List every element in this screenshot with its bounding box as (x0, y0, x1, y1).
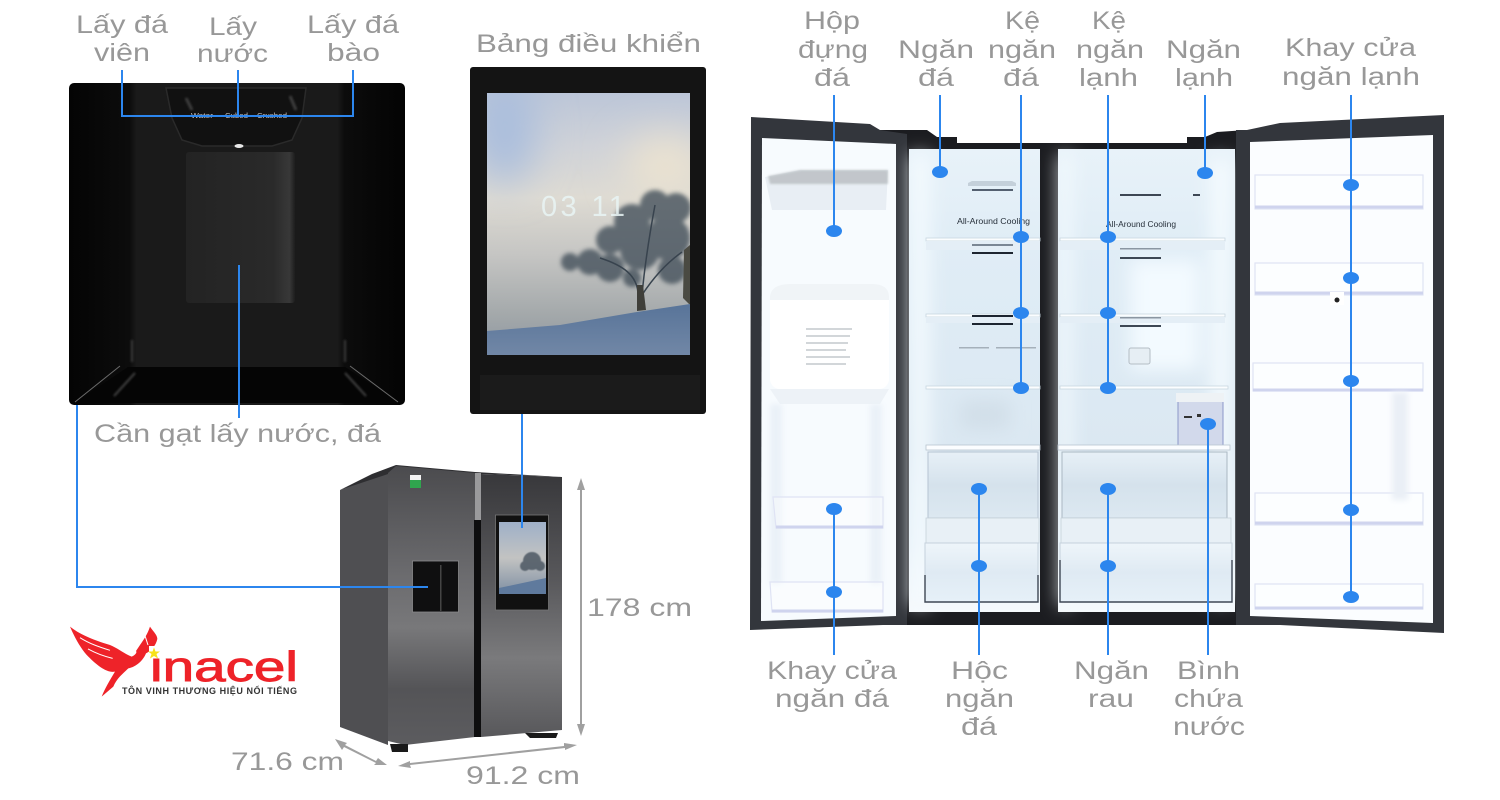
labels: open fridge bottom: nước (1173, 713, 1245, 741)
fridge lower drawer (1060, 518, 1232, 602)
freezer lower drawer (925, 518, 1039, 602)
bird emblem (70, 627, 157, 697)
labels: open fridge bottom: đá (961, 713, 997, 741)
clock: 03 11 (541, 191, 625, 223)
labels: open fridge top: đá (1003, 64, 1039, 92)
left door shades (770, 404, 882, 584)
freezer shelves (926, 181, 1040, 389)
tree (561, 190, 691, 311)
labels: open fridge bottom: rau (1088, 685, 1134, 713)
labels: open fridge bottom (767, 657, 1245, 741)
right door bins (1253, 175, 1423, 609)
fridge feet (390, 733, 558, 752)
freezer caption: All-Around Cooling (957, 217, 1030, 226)
snowy hill (487, 304, 690, 355)
labels: open fridge top: ngăn (988, 36, 1056, 64)
labels: open fridge top: Ngăn (1166, 36, 1241, 64)
dispenser control module: Cubed (225, 113, 248, 120)
fridge right door (481, 474, 562, 737)
panel: water and ice dispenser close-up (69, 83, 405, 405)
fridge cavity (1058, 149, 1235, 612)
dispenser floor (75, 340, 400, 403)
callout lines and markers: open fridge (826, 95, 1359, 655)
labels: dispenser: viên (94, 39, 150, 67)
label: control screen: Bảng điều khiển (476, 30, 701, 58)
right door liner (1250, 135, 1433, 623)
labels: dispenser: Lấy đá (76, 11, 168, 39)
labels: dimensions: 91.2 cm (466, 762, 580, 790)
labels: open fridge top: ngăn lạnh (1282, 63, 1420, 91)
sky tints (487, 93, 690, 196)
fridge top edge (340, 465, 562, 490)
labels: open fridge top (798, 7, 1420, 92)
right door frame (1236, 115, 1444, 633)
ice compartment (765, 170, 888, 210)
arrow: depth (335, 739, 387, 765)
labels: dimensions: 71.6 cm (231, 748, 344, 776)
dispenser lever (186, 152, 295, 303)
labels: open fridge top: Ngăn (898, 36, 974, 64)
labels: open fridge top: Kệ (1092, 7, 1126, 35)
star (148, 648, 160, 658)
labels: open fridge top: đá (814, 64, 850, 92)
ice maker cover (770, 284, 889, 404)
dispenser control module: Water (191, 113, 214, 120)
arrow: height (577, 478, 585, 736)
miniature dispenser (412, 561, 458, 612)
dispenser control module (166, 88, 306, 148)
labels: dispenser: nước (197, 40, 268, 68)
labels: dispenser: Cần gạt lấy nước, đá (94, 420, 381, 448)
panel: exterior fridge (340, 465, 562, 752)
labels: open fridge bottom: Bình (1177, 657, 1240, 685)
labels: dispenser: bào (327, 39, 380, 67)
wordmark: inacel (150, 643, 298, 690)
panel: open fridge (750, 115, 1444, 633)
energy label (410, 475, 421, 488)
left door frame (750, 117, 907, 630)
labels: open fridge top: ngăn (1076, 36, 1144, 64)
speaker grille (480, 375, 700, 410)
fridge shelves (1060, 194, 1228, 389)
fridge body frame (880, 130, 1247, 625)
labels: dispenser (76, 11, 399, 448)
miniature screen (496, 515, 548, 610)
labels: open fridge top: Khay cửa (1285, 34, 1416, 62)
labels: open fridge top: đá (918, 64, 954, 92)
labels: open fridge bottom: chứa (1174, 685, 1243, 713)
fridge left door (388, 466, 475, 745)
freezer cavity (909, 149, 1040, 612)
labels: open fridge bottom: ngăn đá (775, 685, 889, 713)
dispenser control module: Crushed (257, 113, 287, 120)
labels: open fridge top: lạnh (1079, 64, 1138, 92)
logo: Vinacel (70, 627, 298, 697)
letter i dot mask (149, 646, 160, 657)
freezer upper drawer (928, 452, 1038, 518)
labels: open fridge bottom: Hộc (951, 657, 1008, 685)
fridge side (340, 473, 388, 745)
panel: touch control screen (470, 67, 706, 414)
labels: open fridge top: Hộp (804, 7, 860, 35)
left door bins (770, 497, 883, 612)
cavity lighting (912, 155, 1230, 605)
labels: open fridge bottom: Khay cửa (767, 657, 897, 685)
arrow: width (398, 743, 577, 768)
labels: open fridge bottom: Ngăn (1074, 657, 1149, 685)
labels: open fridge bottom: ngăn (945, 685, 1014, 713)
water tank (1176, 393, 1224, 447)
labels: open fridge top: đựng (798, 36, 868, 64)
labels: dimensions: 178 cm (587, 594, 692, 622)
labels: dispenser: Lấy đá (307, 11, 399, 39)
fridge upper drawer (1062, 452, 1227, 518)
labels: dimensions (231, 594, 692, 790)
dimension arrows (335, 478, 585, 768)
screen wallpaper (487, 93, 690, 355)
freezer and fridge drawers (925, 445, 1232, 602)
fridge caption: All-Around Cooling (1106, 220, 1176, 229)
labels: dispenser: Lấy (209, 13, 258, 41)
labels: open fridge top: lạnh (1175, 64, 1233, 92)
door gap (474, 473, 481, 737)
labels: open fridge top: Kệ (1005, 7, 1040, 35)
tagline: TÔN VINH THƯƠNG HIỆU NỔI TIẾNG (122, 685, 297, 696)
callout lines: dispenser (77, 70, 522, 587)
left door liner (761, 138, 896, 621)
